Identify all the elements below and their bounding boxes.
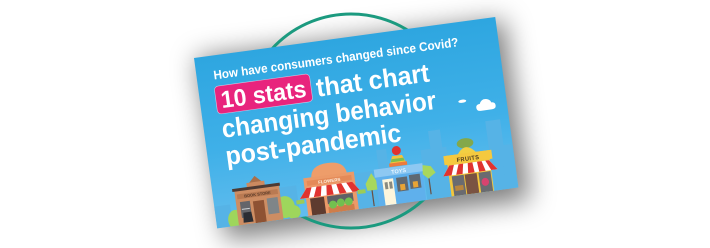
shop: book store	[231, 173, 285, 226]
bush behind bookstore	[228, 196, 301, 226]
green circle ring behind card	[244, 14, 458, 228]
card background	[194, 17, 518, 228]
shop: flowers	[296, 162, 366, 216]
shop: flowers: FLOWERS	[318, 177, 341, 185]
skyline silhouettes	[208, 118, 518, 228]
headline line 3: post-pandemic	[224, 117, 403, 171]
shop: toys	[374, 146, 426, 206]
badge text: 10 stats	[219, 76, 308, 114]
headline line 1: that chart	[314, 58, 431, 103]
pink highlight badge	[214, 74, 313, 115]
shop: fruits	[443, 138, 498, 196]
trees beside toys shop	[366, 165, 436, 206]
subtitle: How have consumers changed since Covid?	[213, 35, 459, 82]
clouds	[458, 99, 496, 111]
shop: toys: TOYS	[391, 168, 407, 176]
headline line 2: changing behavior	[220, 85, 438, 144]
card drop shadow	[196, 20, 530, 240]
rotated card	[194, 17, 519, 232]
shop: book store: BOOK STORE	[244, 190, 271, 198]
shop: fruits: FRUITS	[456, 155, 480, 164]
